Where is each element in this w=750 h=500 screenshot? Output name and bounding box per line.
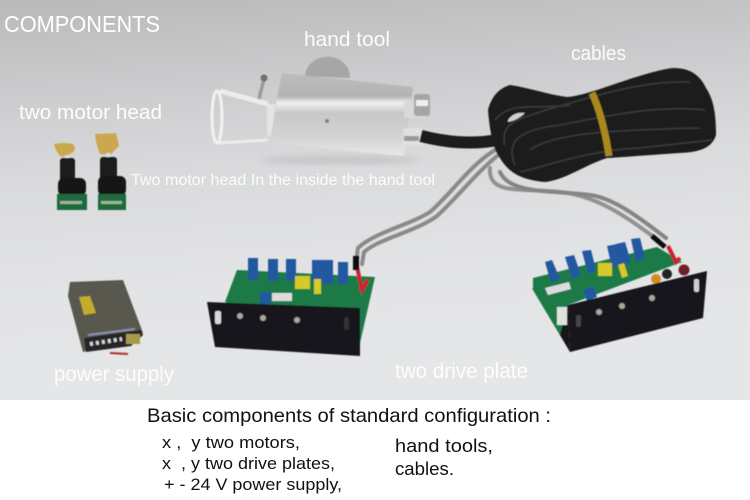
orange and maroon parts	[651, 264, 690, 284]
label: power supply: power supply	[54, 363, 174, 386]
caption heading: Basic components of standard configuration :	[147, 405, 551, 427]
list: motors, plates, power: + - 24 V power supply,	[164, 476, 342, 494]
gold connector	[126, 334, 140, 344]
cable sleeves	[652, 236, 665, 247]
rubber band	[592, 93, 609, 156]
plate holes	[215, 311, 349, 330]
hand tool	[212, 57, 430, 165]
right motor	[95, 133, 126, 210]
power supply	[68, 280, 143, 354]
cables	[421, 68, 716, 182]
yellow capacitors	[295, 276, 321, 294]
label: two motor head: two motor head	[19, 101, 162, 124]
list: motors, plates, power: x , y two drive plates,	[162, 455, 335, 473]
list: motors, plates, power	[162, 434, 342, 494]
two motor heads	[54, 133, 126, 210]
lever	[259, 74, 268, 99]
label: two drive plate: two drive plate	[395, 360, 528, 383]
heading: components: COMPONENTS	[4, 11, 160, 37]
screw hole	[325, 119, 329, 123]
case	[68, 280, 143, 352]
caption text	[147, 405, 551, 494]
connectors	[403, 94, 430, 146]
cable strand highlights	[495, 82, 712, 172]
yellow label	[79, 296, 96, 315]
red wires	[356, 262, 368, 290]
gray wires	[356, 150, 666, 264]
list: motors, plates, power: x , y two motors,	[162, 434, 300, 452]
left drive plate	[207, 256, 375, 356]
blue trimmers	[545, 238, 645, 301]
knob	[305, 57, 350, 78]
tool shadow	[260, 155, 420, 165]
list: hand tools, cables	[395, 435, 493, 479]
label: cables: cables	[571, 43, 626, 65]
label: hand tool: hand tool	[304, 28, 390, 51]
circuit board	[533, 247, 682, 335]
aluminium body	[270, 73, 413, 156]
terminal strip	[84, 330, 143, 352]
side shadow	[532, 288, 570, 352]
wire frame	[212, 91, 271, 143]
coil	[488, 68, 716, 182]
blue trimmers	[248, 258, 348, 304]
blue edge	[88, 329, 135, 335]
photo background	[0, 0, 750, 400]
right drive plate	[532, 236, 707, 352]
plate holes	[576, 279, 699, 327]
white label	[272, 293, 292, 301]
white connector	[557, 307, 567, 325]
coil gap	[508, 113, 525, 122]
wires	[110, 353, 128, 354]
yellow capacitors	[598, 263, 628, 278]
red wires	[668, 246, 680, 262]
left motor	[54, 143, 87, 210]
black mounting plate	[568, 271, 707, 352]
white caption panel	[0, 400, 750, 500]
list: hand tools, cables: cables.	[395, 458, 454, 479]
tail cable	[421, 136, 498, 143]
black mounting plate	[207, 302, 360, 356]
white label	[545, 282, 571, 295]
note: motor head inside hand tool: Two motor head In the inside the hand tool	[131, 172, 435, 189]
list: hand tools, cables: hand tools,	[395, 435, 493, 456]
photo labels	[4, 11, 626, 386]
cable sleeve	[353, 256, 359, 270]
circuit board	[225, 270, 375, 343]
terminal screws	[90, 339, 122, 344]
